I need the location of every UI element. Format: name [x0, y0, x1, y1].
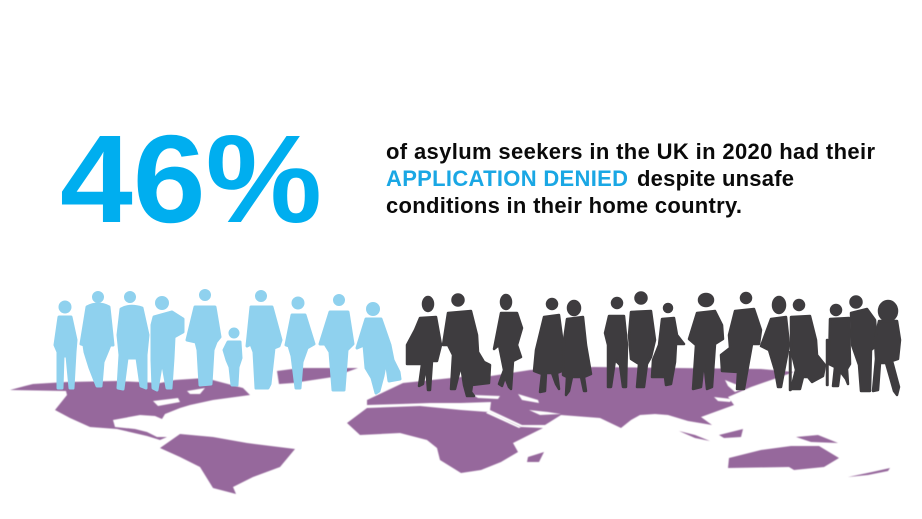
man in hat	[629, 292, 655, 387]
elderly woman with cane	[827, 305, 850, 386]
woman with bag	[152, 298, 183, 390]
man	[81, 292, 113, 386]
woman with curly hair	[873, 301, 900, 395]
Eurasia with Arabia	[367, 367, 794, 428]
statement text: despite unsafe	[637, 166, 794, 191]
Greenland	[277, 368, 358, 384]
man	[187, 290, 220, 385]
world map	[10, 367, 890, 494]
Australia	[728, 446, 839, 470]
North America	[10, 378, 250, 440]
woman with long hair	[761, 297, 789, 387]
New Zealand	[848, 468, 890, 477]
blue silhouettes: accepted applicants	[55, 290, 400, 393]
man	[850, 296, 877, 391]
man	[118, 292, 148, 389]
person in jacket	[689, 294, 723, 389]
white gaps in map	[153, 380, 745, 428]
woman in skirt	[563, 301, 591, 395]
woman in dress	[407, 297, 441, 390]
statement text: of asylum seekers in the UK in 2020 had their	[386, 139, 875, 164]
man	[320, 296, 353, 390]
Madagascar	[527, 452, 544, 462]
statement text: conditions in their home country.	[386, 193, 742, 218]
statement text: APPLICATION DENIED	[386, 166, 628, 191]
woman with bag	[652, 304, 684, 385]
woman with bag	[357, 304, 400, 393]
woman in coat	[534, 299, 563, 392]
South America	[160, 434, 295, 494]
dark silhouettes: denied applicants	[407, 292, 900, 396]
statement text	[386, 139, 875, 218]
Africa	[347, 406, 543, 473]
girl	[55, 302, 76, 388]
man	[247, 292, 281, 388]
Indonesia islands	[679, 431, 710, 441]
big statistic: 46%: 46%	[60, 110, 322, 249]
woman	[286, 298, 314, 388]
man	[605, 298, 627, 387]
man with bag	[443, 294, 490, 396]
person with walker and bag	[790, 300, 825, 390]
child	[224, 329, 241, 385]
man with bag	[721, 293, 761, 389]
New Guinea	[796, 435, 838, 443]
Borneo	[719, 429, 743, 438]
woman	[494, 295, 522, 389]
